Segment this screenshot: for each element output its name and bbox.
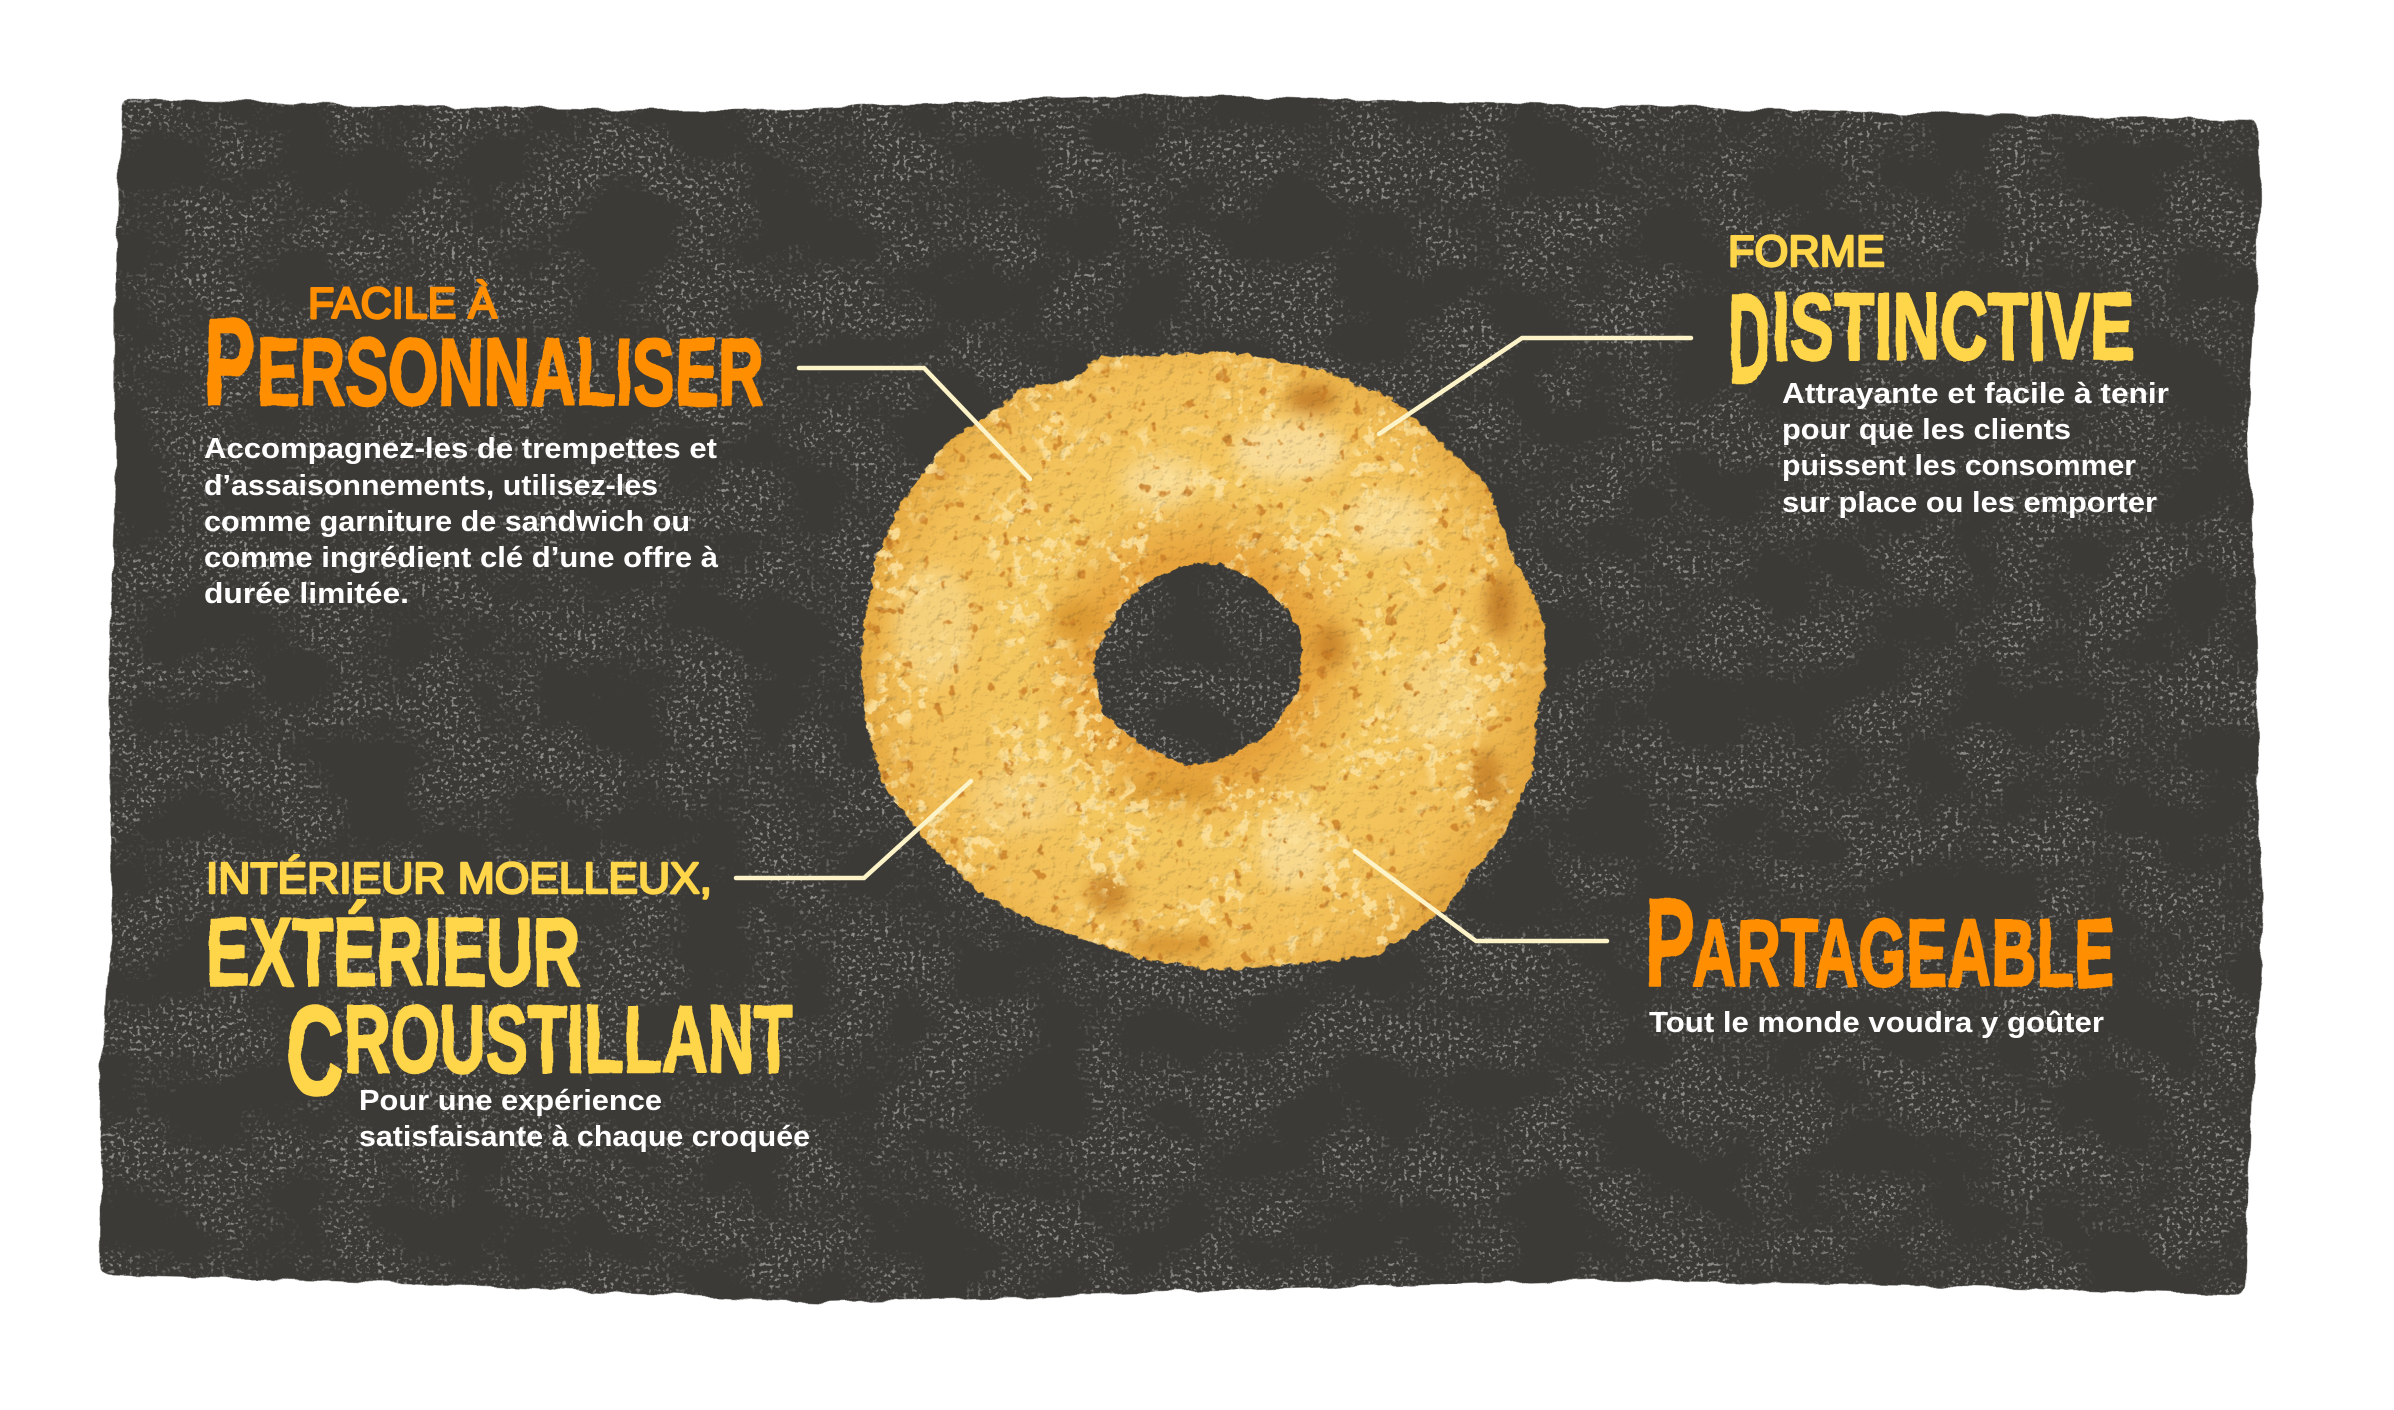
connector line: partageable xyxy=(1355,851,1607,941)
heading: P xyxy=(1645,874,1695,1013)
description xyxy=(359,1085,810,1153)
heading line two xyxy=(286,981,793,1122)
heading: ERSONNALISER xyxy=(257,319,764,426)
description: comme ingrédient clé d’une offre à xyxy=(204,542,719,574)
description: satisfaisante à chaque croquée xyxy=(359,1121,810,1153)
description: comme garniture de sandwich ou xyxy=(204,506,690,538)
heading: ISTINCTIVE xyxy=(1772,274,2134,380)
heading: P xyxy=(204,293,255,432)
connector line: personnaliser xyxy=(799,368,1030,479)
description: Tout le monde voudra y goûter xyxy=(1649,1007,2104,1039)
heading: D xyxy=(1728,268,1770,409)
description: puissent les consommer xyxy=(1782,450,2136,482)
description xyxy=(1782,378,2169,519)
heading line two: C xyxy=(286,981,344,1122)
description: d’assaisonnements, utilisez-les xyxy=(204,470,658,502)
description: sur place ou les emporter xyxy=(1782,487,2157,519)
connector line: croustillant xyxy=(736,781,971,878)
callout: forme distinctive xyxy=(1728,227,2169,519)
heading line one: EXTÉRIEUR xyxy=(206,899,580,1006)
description xyxy=(204,433,719,610)
subheading: INTÉRIEUR MOELLEUX, xyxy=(206,854,712,903)
heading xyxy=(1728,268,2134,409)
heading xyxy=(1645,874,2115,1013)
subheading: FORME xyxy=(1728,227,1885,276)
description: Attrayante et facile à tenir xyxy=(1782,378,2169,410)
panel: chalkboard background xyxy=(90,85,2280,1310)
callout: facile à personnaliser xyxy=(204,279,764,610)
callout: intérieur moelleux, extérieur croustillant xyxy=(206,854,810,1153)
heading: ARTAGEABLE xyxy=(1692,900,2115,1007)
description: durée limitée. xyxy=(204,578,409,610)
description: Accompagnez-les de trempettes et xyxy=(204,433,717,465)
image: fried potato ring xyxy=(859,351,1548,972)
heading xyxy=(204,293,764,432)
heading line two: ROUSTILLANT xyxy=(344,986,793,1093)
description: pour que les clients xyxy=(1782,414,2071,446)
callout: partageable xyxy=(1645,874,2115,1039)
subheading: FACILE À xyxy=(308,279,498,328)
description: Pour une expérience xyxy=(359,1085,662,1117)
connector line: distinctive xyxy=(1379,338,1691,434)
